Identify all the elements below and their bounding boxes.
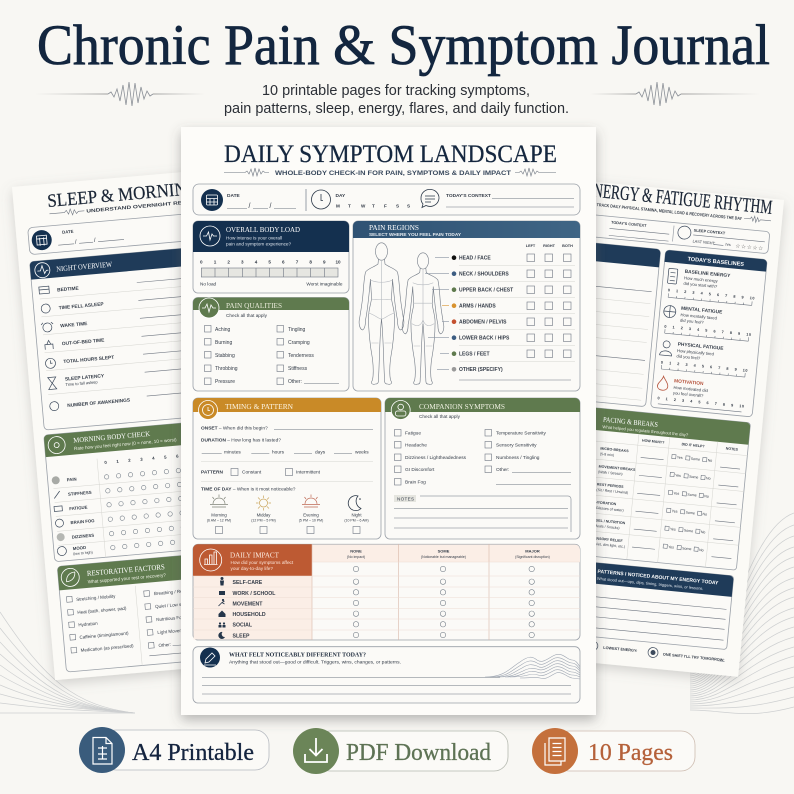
- time of day: (10 PM – 6 AM): [344, 518, 369, 522]
- pattern field: PATTERN: [201, 470, 223, 476]
- panel: pain qualities: Check all that apply: [226, 313, 268, 318]
- region rows: OTHER (SPECIFY): [459, 367, 503, 373]
- onset and duration fields: minutes: [224, 450, 241, 456]
- left page subtitle: UNDERSTAND OVERNIGHT REST AND: [86, 198, 207, 215]
- panel: overall body load: [193, 221, 349, 293]
- left page date box: /: [75, 240, 77, 246]
- onset and duration fields: [201, 426, 373, 462]
- pacing and breaks panel: PACING & BREAKS: [603, 416, 658, 429]
- onset and duration fields: DURATION – How long has it lasted?: [201, 438, 281, 444]
- symptom rows: STIFFNESS: [68, 490, 92, 497]
- impact row labels: SELF-CARE: [232, 580, 263, 586]
- column heads: (Noticeable but manageable): [421, 555, 466, 559]
- right page context box: TODAY'S CONTEXT: [611, 221, 647, 228]
- baseline energy: [666, 267, 757, 306]
- night rows: TOTAL HOURS SLEPT: [63, 355, 115, 365]
- icon: download arrow: [305, 738, 327, 762]
- pacing and breaks panel: What helped you regulate throughout the day?: [602, 424, 689, 437]
- morning body check panel: [44, 399, 463, 562]
- rating numbers: 6: [176, 453, 179, 459]
- date and context row: /: [270, 203, 272, 210]
- motivation: 0 1 2 3 4 5 6 7 8 9 10: [657, 396, 744, 409]
- region rows: UPPER BACK / CHEST: [459, 288, 513, 294]
- mental fatigue: MENTAL FATIGUE: [681, 306, 723, 316]
- column heads: (Significant disruption): [515, 555, 550, 559]
- notes box: [394, 495, 571, 532]
- weekday letters: S: [396, 204, 399, 208]
- one shift label: [648, 647, 725, 664]
- time of day: (5 PM – 10 PM): [299, 518, 323, 522]
- physical fatigue: How physically tired: [677, 348, 715, 357]
- panel: what felt different: Anything that stood out—good or difficult. Triggers, wins, changes, or patterns.: [229, 660, 401, 664]
- mental fatigue: did you feel?: [680, 318, 705, 325]
- pain quality checklist: Other:: [288, 379, 302, 385]
- pacing and breaks panel: NOTES: [726, 447, 739, 452]
- restorative checklist: Light Movement: [157, 627, 190, 635]
- badge: A4 printable: A4 Printable: [132, 739, 254, 766]
- symptom rows: DIZZINESS: [72, 533, 94, 540]
- onset and duration fields: hours: [272, 450, 285, 456]
- pain scale numbers: 2: [227, 260, 230, 264]
- pacing table rows: Yes: [675, 473, 681, 478]
- baseline energy: BASELINE ENERGY: [684, 269, 731, 279]
- panel: daily impact table: your day-to-day life?: [230, 566, 273, 571]
- region rows: ARMS / HANDS: [459, 304, 496, 310]
- pain quality checklist: Aching: [215, 327, 231, 333]
- badge: 10 pages: 10 Pages: [588, 739, 673, 766]
- panel: daily impact table: DAILY IMPACT: [230, 550, 279, 560]
- panel: daily impact table: How did your symptoms affect: [230, 560, 294, 565]
- subtitle: pain patterns, sleep, energy, flares, and daily function.: [224, 101, 569, 117]
- impact row labels: HOUSEHOLD: [232, 612, 266, 618]
- physical fatigue: did you feel?: [676, 353, 701, 361]
- panel: pain qualities: [193, 298, 349, 391]
- companion checklist: Dizziness / Lightheadedness: [405, 455, 467, 461]
- pain quality checklist: Tingling: [288, 327, 306, 333]
- icon: pages: [545, 738, 565, 765]
- subtitle: [224, 83, 569, 117]
- rating numbers: 5: [164, 455, 167, 460]
- restorative checklist: Caffeine (timing/amount): [79, 631, 129, 640]
- pacing table rows: Some: [684, 528, 693, 533]
- pain scale numbers: 6: [282, 260, 285, 264]
- impact row labels: WORK / SCHOOL: [232, 591, 276, 597]
- weekday letters: T: [348, 204, 351, 208]
- page heading: DAILY SYMPTOM LANDSCAPE: [224, 139, 557, 168]
- pacing table rows: (Walk / Stretch): [598, 470, 623, 476]
- pain quality checklist: Burning: [215, 340, 232, 346]
- motivation: [656, 376, 746, 412]
- panel: what felt different: WHAT FELT NOTICEABLY DIFFERENT TODAY?: [229, 652, 366, 658]
- pacing table rows: Some: [687, 493, 697, 497]
- onset and duration fields: weeks: [355, 450, 369, 456]
- notes box: NOTES: [397, 496, 414, 502]
- panel: daily impact table: [193, 544, 580, 640]
- motivation: MOTIVATION: [674, 378, 704, 387]
- panel: timing and pattern: TIMING & PATTERN: [225, 402, 294, 411]
- title: Chronic Pain & Symptom Journal: [37, 14, 770, 77]
- pattern field: Constant: [242, 470, 262, 476]
- companion checklist: Temperature Sensitivity: [496, 430, 546, 436]
- mental fatigue: How mentally taxed: [680, 312, 718, 321]
- region rows: HEAD / FACE: [459, 256, 491, 262]
- baseline energy: did you start with?: [683, 281, 718, 289]
- icon: person badge: [391, 400, 410, 420]
- date and context row: [193, 184, 580, 215]
- todays baselines panel: TODAY'S BASELINES: [687, 257, 745, 268]
- icon: clock: [312, 190, 330, 209]
- pacing table rows: No: [704, 494, 709, 499]
- waveform decoration left: [35, 82, 205, 106]
- right page context box: SLEEP CONTEXT: [693, 228, 726, 236]
- icon: document: [93, 738, 112, 764]
- morning body check panel: Rate how you feel right now (0 = none, 10 = worst): [74, 437, 177, 451]
- pain scale numbers: 7: [296, 260, 299, 264]
- symptom rows: BRAIN FOG: [70, 518, 95, 525]
- weekday letters: W: [361, 204, 366, 208]
- panel: overall body load: pain and symptom experience?: [226, 242, 292, 246]
- column headings left right both: BOTH: [562, 244, 573, 248]
- pain scale numbers: 8: [309, 260, 312, 264]
- impact row labels: MOVEMENT: [232, 602, 263, 608]
- panel: overall body load: OVERALL BODY LOAD: [226, 225, 301, 234]
- physical fatigue: [658, 340, 750, 377]
- waveform decoration right: [590, 82, 760, 106]
- pacing and breaks panel: HOW MANY?: [642, 439, 665, 445]
- region rows: LEGS / FEET: [459, 352, 490, 358]
- panel: daily symptom landscape page: [181, 127, 596, 715]
- pacing table rows: No: [702, 512, 707, 517]
- night overview panel: [30, 226, 452, 430]
- panel: overall body load: No load: [200, 282, 217, 286]
- background contour lines: [0, 513, 794, 714]
- time of day: (6 AM – 12 PM): [207, 518, 231, 522]
- pacing table rows: FUEL / NUTRITION: [593, 518, 626, 525]
- pain quality checklist: Stiffness: [288, 366, 308, 372]
- right page subtitle: TRACK DAILY PHYSICAL STAMINA, MENTAL LOAD & RECOVERY ACROSS THE DAY: [596, 202, 742, 221]
- icon: pen: [200, 648, 220, 668]
- panel: companion symptoms: Check all that apply: [419, 414, 461, 419]
- pacing table rows: Yes: [671, 509, 678, 514]
- symptom rows: PAIN: [67, 476, 77, 482]
- companion checklist: [394, 430, 571, 486]
- rating numbers: [104, 451, 203, 465]
- pain scale numbers: 10: [335, 260, 341, 264]
- pacing table rows: Yes: [673, 491, 680, 496]
- pacing table rows: Some: [689, 475, 699, 480]
- left page date box: [28, 193, 428, 255]
- icon: calendar: [201, 189, 223, 211]
- pain quality checklist: [204, 326, 339, 385]
- pacing table rows: Some: [691, 457, 700, 462]
- pacing table rows: Yes: [670, 527, 676, 532]
- weekday letters: S: [407, 204, 410, 208]
- restorative factors panel: RESTORATIVE FACTORS: [87, 562, 165, 578]
- pacing table rows: HYDRATION: [595, 500, 617, 506]
- patterns panel: What stood out—ups, dips, timing, triggers, wins, or lessons.: [597, 576, 704, 591]
- restorative checklist: [66, 582, 243, 663]
- pain scale numbers: 1: [214, 260, 217, 264]
- icon: midday: [256, 496, 271, 510]
- pacing and breaks panel: DID IT HELP?: [681, 442, 705, 449]
- companion checklist: GI Discomfort: [405, 467, 435, 473]
- restorative checklist: Quiet / Low stimulation: [155, 600, 201, 609]
- weekday letters: [336, 204, 410, 208]
- night rows: SLEEP LATENCY: [65, 373, 105, 383]
- onset and duration fields: ONSET – When did this begin?: [201, 426, 268, 432]
- symptom rows: MOOD: [73, 545, 86, 551]
- rating numbers: 4: [152, 456, 155, 461]
- icon: evening: [302, 494, 320, 507]
- icon: speech bubble: [421, 189, 439, 208]
- pacing table rows: Yes: [668, 545, 674, 550]
- time of day: TIME OF DAY – When is it most noticeable?: [201, 486, 296, 492]
- panel: overall body load: Worst imaginable: [306, 282, 343, 286]
- badge: PDF download: PDF Download: [346, 739, 491, 766]
- subtitle: 10 printable pages for tracking symptoms,: [262, 83, 530, 99]
- morning body check panel: MORNING BODY CHECK: [73, 430, 150, 445]
- companion checklist: Other:: [496, 467, 509, 473]
- time of day: Evening: [303, 512, 319, 518]
- date and context row: DATE: [227, 193, 241, 199]
- patterns panel: [512, 555, 734, 650]
- time of day: Night: [351, 512, 362, 518]
- region rows: LOWER BACK / HIPS: [459, 336, 510, 342]
- badge: PDF download: [293, 728, 508, 774]
- pain quality checklist: Cramping: [288, 340, 310, 346]
- left page date box: /: [94, 238, 96, 244]
- impact row labels: [232, 580, 276, 639]
- mountain contour illustration: [485, 654, 580, 679]
- restorative checklist: Stretching / Mobility: [76, 593, 116, 602]
- time of day: Midday: [257, 512, 271, 518]
- pain quality checklist: Throbbing: [215, 366, 238, 372]
- motivation: How motivated did: [673, 385, 709, 393]
- impact row labels: SOCIAL: [232, 623, 253, 629]
- pain quality checklist: Pressure: [215, 379, 235, 385]
- symptom rows: [50, 448, 224, 561]
- companion checklist: Sensory Sensitivity: [496, 442, 537, 448]
- weekday letters: F: [384, 204, 387, 208]
- rating numbers: 8: [200, 451, 203, 457]
- baseline energy: How much energy: [684, 275, 719, 284]
- symptom rows: (low to high): [73, 550, 93, 556]
- right page context box: ☆☆☆☆☆: [735, 243, 764, 252]
- icon: green pulse badge: [199, 298, 219, 318]
- companion checklist: Headache: [405, 442, 427, 448]
- pain quality checklist: Stabbing: [215, 353, 235, 359]
- pain scale numbers: [200, 260, 341, 264]
- mental fatigue: 0 1 2 3 4 5 6 7 8 9 10: [664, 325, 751, 337]
- night rows: OUT-OF-BED TIME: [62, 337, 105, 347]
- night rows: [38, 273, 211, 411]
- restorative checklist: Medication (as prescribed): [80, 643, 134, 653]
- restorative checklist: Other:: [158, 642, 171, 648]
- restorative checklist: Breathing / Relaxation: [154, 587, 199, 596]
- todays baselines panel: [651, 250, 767, 417]
- column heads: [347, 548, 550, 559]
- right page context box: [560, 212, 770, 254]
- night overview panel: NIGHT OVERVIEW: [56, 260, 113, 273]
- pattern field: [201, 468, 373, 482]
- date and context row: /: [248, 203, 250, 210]
- rating numbers: 2: [128, 458, 131, 463]
- icon: morning: [210, 494, 228, 507]
- date and context row: TODAY'S CONTEXT: [446, 193, 491, 199]
- pain scale numbers: 4: [255, 260, 258, 264]
- rating numbers: 7: [188, 452, 191, 458]
- weekday letters: T: [372, 204, 375, 208]
- body figure back: [402, 253, 444, 384]
- right page context box: LAST NIGHT:: [692, 239, 716, 246]
- icon: bar chart badge: [200, 549, 222, 571]
- panel: companion symptoms: [385, 398, 580, 539]
- night rows: Time to fall asleep: [65, 379, 99, 387]
- physical fatigue: 0 1 2 3 4 5 6 7 8 9 10: [661, 360, 748, 373]
- region rows: [425, 254, 575, 380]
- pacing table rows: MOVEMENT BREAKS: [598, 464, 636, 472]
- panel: left page sleep and morning: [12, 150, 484, 680]
- pain scale numbers: 5: [268, 260, 271, 264]
- mental fatigue: [662, 304, 753, 341]
- icon: night: [348, 496, 361, 511]
- panel: pain regions: PAIN REGIONS: [369, 223, 419, 232]
- pacing table rows: (Meals / Snacks): [593, 524, 620, 530]
- pain scale numbers: 9: [323, 260, 326, 264]
- badge: A4 printable: [79, 727, 269, 773]
- weekday letters: M: [336, 204, 340, 208]
- lowest energy label: LOWEST ENERGY:: [603, 646, 638, 653]
- physical fatigue: PHYSICAL FATIGUE: [677, 341, 724, 352]
- pacing table rows: (Sit / Rest / Unwind): [596, 488, 628, 495]
- companion checklist: Brain Fog: [405, 480, 426, 486]
- pacing table rows: SENSORY RELIEF: [592, 536, 624, 543]
- time of day: (12 PM – 5 PM): [251, 518, 276, 522]
- column headings left right both: RIGHT: [543, 244, 556, 248]
- page subheading: [224, 168, 556, 177]
- impact row icons: [218, 577, 226, 639]
- icon: orange clock badge: [198, 400, 218, 420]
- night rows: WAKE TIME: [60, 321, 88, 329]
- symptom rows: FATIGUE: [69, 505, 88, 511]
- baseline energy: 0 1 2 3 4 5 6 7 8 9 10: [668, 288, 755, 301]
- body figure front: [359, 243, 404, 384]
- companion checklist: Numbness / Tingling: [496, 455, 540, 461]
- restorative factors panel: What supported your rest or recovery?: [87, 573, 166, 584]
- icon: pulse circle: [200, 226, 220, 246]
- column heads: MAJOR: [525, 548, 540, 554]
- pacing table rows: (Glasses of water): [594, 506, 624, 513]
- panel: what felt different: [193, 647, 580, 703]
- column heads: SOME: [438, 548, 450, 554]
- panel: pain regions: [353, 221, 580, 391]
- motivation: you feel overall?: [673, 390, 704, 398]
- region rows: NECK / SHOULDERS: [459, 272, 509, 278]
- region rows: ABDOMEN / PELVIS: [459, 320, 507, 326]
- pacing table rows: [591, 447, 741, 559]
- panel: pain regions: SELECT WHERE YOU FEEL PAIN TODAY: [369, 232, 461, 237]
- time of day: Morning: [211, 512, 227, 518]
- date and context row: DAY: [336, 193, 346, 199]
- restorative factors panel: [57, 531, 473, 672]
- pacing table rows: No: [708, 458, 712, 463]
- column headings left right both: LEFT: [526, 244, 536, 248]
- right page context box: hrs: [725, 243, 731, 247]
- panel: timing and pattern: [193, 398, 381, 539]
- pacing table rows: MICRO-BREAKS: [600, 447, 629, 453]
- pacing table rows: Some: [682, 546, 692, 551]
- night rows: NUMBER OF AWAKENINGS: [67, 397, 131, 409]
- pattern field: Intermittent: [296, 470, 321, 476]
- left page title: SLEEP & MORNING: [47, 179, 200, 212]
- panel: pain qualities: PAIN QUALITIES: [226, 301, 282, 310]
- rating numbers: 3: [140, 457, 143, 462]
- page subheading: WHOLE-BODY CHECK-IN FOR PAIN, SYMPTOMS & DAILY IMPACT: [275, 170, 511, 177]
- night rows: BEDTIME: [57, 286, 80, 293]
- impact row labels: SLEEP: [232, 633, 250, 639]
- energy log panel: [534, 239, 661, 407]
- pain scale numbers: 3: [241, 260, 244, 264]
- impact radio buttons: [353, 566, 534, 638]
- pain quality checklist: Tenderness: [288, 353, 314, 359]
- pacing table rows: Some: [685, 511, 695, 515]
- pacing table rows: (Quiet, dim light, etc.): [591, 542, 625, 549]
- pain scale bar: [201, 268, 338, 277]
- rating numbers: 0: [104, 460, 108, 465]
- restorative checklist: Nutritious Food: [156, 614, 187, 622]
- patterns panel: PATTERNS I NOTICED ABOUT MY ENERGY TODAY: [597, 569, 719, 587]
- restorative checklist: Hydration: [78, 621, 98, 627]
- rating numbers: 1: [116, 459, 120, 464]
- badge: 10 pages: [532, 728, 695, 774]
- pacing table rows: REST PERIODS: [597, 482, 624, 489]
- restorative checklist: Heat (bath, shower, pad): [77, 606, 127, 615]
- column heads: NONE: [350, 548, 362, 554]
- panel: overall body load: How intense is your overall: [226, 236, 282, 240]
- pacing table rows: No: [701, 530, 706, 534]
- pacing table rows: No: [706, 476, 711, 481]
- column heads: (No impact): [347, 555, 365, 559]
- pacing table rows: Yes: [677, 455, 683, 460]
- onset and duration fields: days: [315, 450, 326, 456]
- companion checklist: Fatigue: [405, 430, 421, 436]
- panel: right page energy and fatigue: [310, 157, 784, 677]
- one shift label: ONE SHIFT I'LL TRY TOMORROW:: [663, 652, 725, 662]
- panel: companion symptoms: COMPANION SYMPTOMS: [419, 402, 505, 411]
- pacing and breaks panel: [519, 402, 750, 570]
- time of day: [201, 486, 369, 534]
- night rows: TIME FELL ASLEEP: [58, 301, 105, 311]
- pacing table rows: (5-8 min): [600, 452, 614, 457]
- pain scale numbers: 0: [200, 260, 203, 264]
- pacing table rows: No: [699, 548, 704, 552]
- lowest energy label: [588, 641, 638, 655]
- column headings left right both: [526, 244, 573, 248]
- left page date box: DATE: [62, 229, 74, 235]
